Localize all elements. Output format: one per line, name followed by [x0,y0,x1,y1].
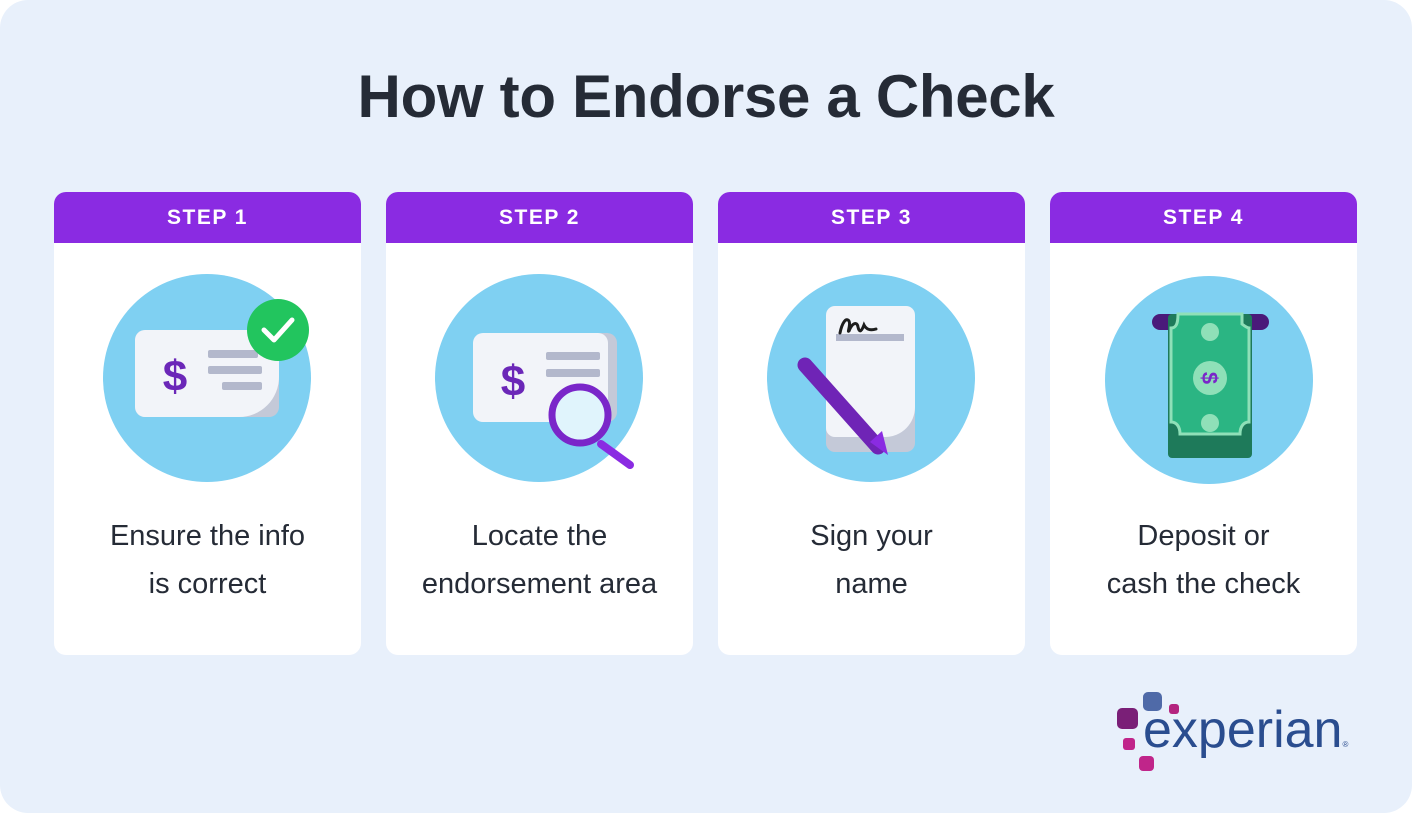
icon: check with checkmark [103,274,311,482]
step 2 header [386,192,693,243]
step 2 text: Locate the [472,520,607,552]
logo: experian [1117,692,1348,771]
step 2 text: endorsement area [422,568,657,600]
logo: experian: experian® [1143,701,1348,759]
title: How to Endorse a Check [358,63,1054,130]
step 4 header: STEP 4 [1163,206,1244,229]
step 4 text [1107,520,1300,600]
step 2 text [422,520,658,600]
step 3 text: Sign your [810,520,933,552]
step 2 header: STEP 2 [499,206,580,229]
icon: check with checkmark: $ [163,352,187,401]
step 1 header: STEP 1 [167,206,248,229]
panel: step 1 [54,192,361,655]
panel: step 4 [1050,192,1357,655]
step 3 header: STEP 3 [831,206,912,229]
step 1 text: Ensure the info [110,520,305,552]
icon: cash from slot: $ [1197,372,1222,384]
icon: check with magnifier: $ [501,357,525,406]
step 1 header [54,192,361,243]
icon: cash from slot [1105,276,1313,484]
step 3 text: name [835,568,908,600]
step 1 text: is correct [149,568,266,600]
step 1 text [110,520,305,600]
icon: check with magnifier [435,274,643,482]
panel: step 2 [386,192,693,655]
step 4 text: Deposit or [1137,520,1270,552]
panel: step 3 [718,192,1025,655]
step 3 header [718,192,1025,243]
icon: paper and pen [767,274,975,482]
step 3 text [810,520,933,600]
step 4 text: cash the check [1107,568,1300,600]
step 4 header [1050,192,1357,243]
